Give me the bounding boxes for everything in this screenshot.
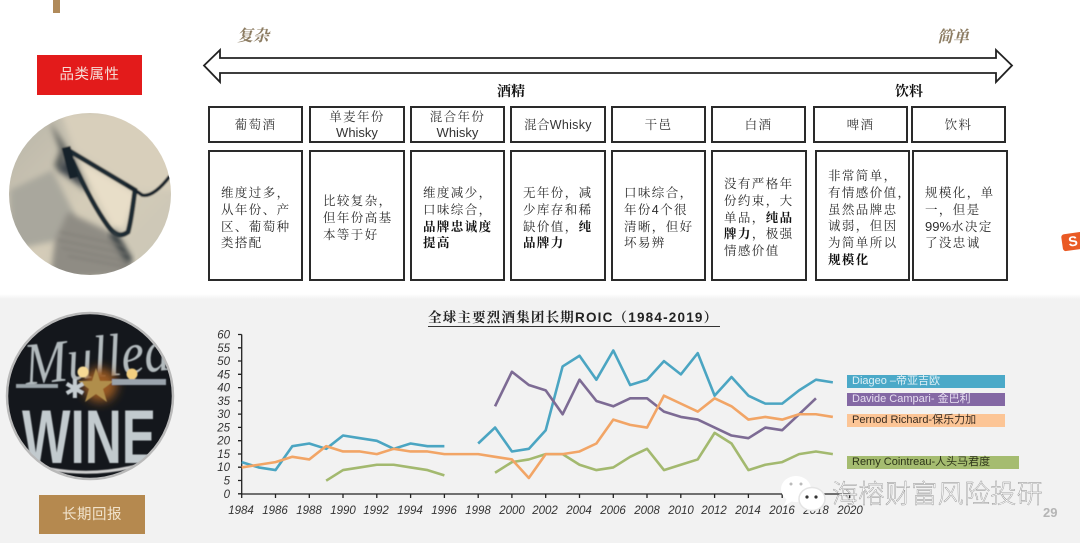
header: 单麦年份 Whisky	[309, 106, 405, 143]
box: 干邑 description: 坏易辨	[624, 236, 666, 250]
header: 混合Whisky: 混合Whisky	[524, 118, 592, 132]
series: Pernod Richard	[242, 396, 833, 478]
legend item: Diageo: Diageo –帝亚吉欧	[852, 375, 940, 387]
x axis with labels: 1996	[431, 505, 457, 517]
y axis with labels: 45	[217, 369, 231, 381]
label: 品类属性	[37, 55, 142, 95]
box: 混合Whisky description: 少库存和稀	[523, 203, 593, 217]
heading: 饮料: 饮料	[895, 83, 923, 99]
y axis with labels: 20	[216, 436, 231, 448]
line chart: long-term ROIC	[216, 330, 863, 517]
legend	[847, 374, 1019, 469]
icon: orange S badge: S	[1067, 232, 1079, 250]
y axis with labels: 15	[217, 449, 231, 461]
x axis with labels: 2018	[802, 505, 829, 517]
header: 白酒	[711, 106, 806, 143]
box: 啤酒 description: 有情感价值，	[828, 186, 911, 200]
x axis with labels: 1992	[363, 505, 389, 517]
header: 白酒: 白酒	[745, 118, 772, 132]
x axis with labels: 2000	[498, 505, 525, 517]
box: 白酒 description: 牌力，极强	[724, 227, 794, 241]
header: 混合Whisky	[510, 106, 606, 143]
header: 混合年份 Whisky: Whisky	[437, 124, 478, 140]
box: 混合年份 description: 提高	[423, 236, 451, 250]
box: 白酒 description: 情感价值	[724, 244, 780, 258]
y axis with labels: 60	[217, 330, 231, 342]
label: 复杂: 复杂	[237, 28, 269, 45]
box: 混合年份 description: 品牌忠诚度	[423, 220, 493, 234]
y axis with labels: 10	[217, 462, 231, 474]
box: 葡萄酒 description: 区、葡萄种	[221, 220, 291, 234]
x axis with labels: 2014	[734, 505, 761, 517]
box: 混合年份 description: 维度减少，	[423, 186, 493, 200]
x axis with labels: 2008	[633, 505, 660, 517]
x axis with labels: 2010	[667, 505, 694, 517]
box: 单麦年份 description: 比较复杂，	[323, 194, 393, 208]
x axis with labels: 2002	[531, 505, 558, 517]
box: 啤酒 description: 虽然品牌忠	[828, 203, 898, 217]
x axis with labels: 1998	[465, 505, 491, 517]
legend item: Remy Cointreau: Remy Cointreau-人头马君度	[852, 456, 990, 468]
y axis with labels: 55	[217, 343, 231, 355]
box: 饮料 description: 了没忠诚	[925, 236, 981, 250]
photo: mulled wine sign: ✱	[64, 374, 86, 404]
box: 饮料 description: 99%水决定	[925, 219, 993, 234]
legend item: Pernod Richard: Pernod Richard-保乐力加	[852, 414, 976, 426]
box: 混合Whisky description	[510, 150, 606, 281]
watermark text: 海榕财富风险投研	[832, 479, 1043, 509]
box: 饮料 description	[912, 150, 1008, 281]
box: 单麦年份 description	[309, 150, 405, 281]
y axis with labels: 50	[217, 356, 231, 368]
box: 混合年份 description: 口味综合，	[423, 203, 493, 217]
header: 混合年份 Whisky	[410, 106, 505, 143]
heading: 酒精: 酒精	[497, 83, 525, 99]
box: 啤酒 description: 诚弱，但因	[828, 219, 898, 233]
series: Diageo	[242, 350, 833, 470]
label: 品类属性: 品类属性	[60, 67, 120, 83]
label: 长期回报: 长期回报	[62, 507, 122, 523]
y axis with labels: 0	[224, 489, 231, 501]
box: 混合Whisky description: 缺价值，纯	[523, 220, 593, 234]
box: 白酒 description: 单品，纯品	[724, 211, 794, 225]
chart title: 全球主要烈酒集团长期ROIC（1984-2019）	[428, 310, 718, 325]
y axis with labels	[216, 330, 242, 501]
box: 干邑 description: 年份4个很	[624, 203, 688, 217]
lower section background	[0, 294, 1080, 543]
box: 葡萄酒 description: 维度过多，	[221, 186, 291, 200]
y axis with labels: 5	[224, 476, 231, 488]
box: 啤酒 description: 非常简单，	[828, 169, 898, 183]
photo: mulled wine sign	[6, 312, 174, 480]
box: 饮料 description: 一，但是	[925, 203, 981, 217]
header: 葡萄酒	[208, 106, 303, 143]
y axis with labels: 35	[217, 396, 231, 408]
header: 啤酒: 啤酒	[847, 118, 874, 132]
x axis with labels: 1984	[228, 505, 254, 517]
x axis with labels: 2012	[700, 505, 727, 517]
label: 简单: 简单	[937, 29, 969, 46]
legend item: Diageo	[847, 375, 1005, 388]
x axis with labels	[228, 494, 863, 517]
box: 啤酒 description: 规模化	[828, 253, 870, 267]
box: 葡萄酒 description	[208, 150, 303, 281]
box: 白酒 description: 没有严格年	[724, 177, 794, 191]
box: 葡萄酒 description: 类搭配	[221, 236, 263, 250]
x axis with labels: 1990	[330, 505, 356, 517]
top brown accent bar	[53, 0, 60, 13]
y axis with labels: 25	[216, 422, 231, 434]
header: 干邑	[611, 106, 706, 143]
header: 饮料	[911, 106, 1006, 143]
icon: WeChat watermark	[781, 476, 826, 512]
series: Davide Campari	[495, 372, 816, 438]
box: 单麦年份 description: 本等于好	[323, 228, 379, 242]
page number: 29	[1043, 505, 1057, 520]
photo: glasses	[9, 113, 171, 275]
header: 干邑: 干邑	[645, 118, 672, 132]
x axis with labels: 1994	[397, 505, 423, 517]
box: 啤酒 description: 为简单所以	[828, 236, 898, 250]
x axis with labels: 2006	[599, 505, 626, 517]
box: 白酒 description	[711, 150, 807, 281]
series: Remy Cointreau	[326, 433, 833, 481]
box: 干邑 description	[611, 150, 706, 281]
header: 单麦年份 Whisky: 单麦年份	[329, 110, 385, 124]
x axis with labels: 1986	[262, 505, 288, 517]
label: 长期回报	[39, 495, 145, 534]
box: 干邑 description: 清晰，但好	[624, 220, 694, 234]
box: 白酒 description: 份约束，大	[724, 194, 794, 208]
box: 混合Whisky description: 无年份，减	[523, 186, 593, 200]
header: 混合年份 Whisky: 混合年份	[430, 110, 485, 124]
header: 葡萄酒: 葡萄酒	[235, 118, 276, 132]
header: 啤酒	[813, 106, 908, 143]
box: 混合Whisky description: 品牌力	[523, 236, 565, 250]
legend item: Davide Campari: Davide Campari- 金巴利	[852, 393, 971, 405]
header: 单麦年份 Whisky: Whisky	[336, 124, 378, 140]
x axis with labels: 2020	[836, 505, 863, 517]
x axis with labels: 2016	[768, 505, 795, 517]
box: 单麦年份 description: 但年份高基	[323, 211, 393, 225]
y axis with labels: 40	[217, 383, 231, 395]
header: 饮料: 饮料	[945, 118, 972, 132]
category description boxes	[208, 150, 1008, 281]
box: 饮料 description: 规模化，单	[925, 186, 995, 200]
box: 混合年份 description	[410, 150, 505, 281]
x axis with labels: 1988	[296, 505, 322, 517]
arrow: complexity scale double arrow	[202, 48, 1014, 84]
x axis with labels: 2004	[565, 505, 592, 517]
legend item: Davide Campari	[847, 393, 1005, 406]
box: 干邑 description: 口味综合，	[624, 186, 694, 200]
box: 啤酒 description	[815, 150, 910, 281]
box: 葡萄酒 description: 从年份、产	[221, 203, 291, 217]
y axis with labels: 30	[217, 409, 231, 421]
category headers	[208, 106, 1006, 143]
icon: orange S badge	[1061, 232, 1080, 251]
